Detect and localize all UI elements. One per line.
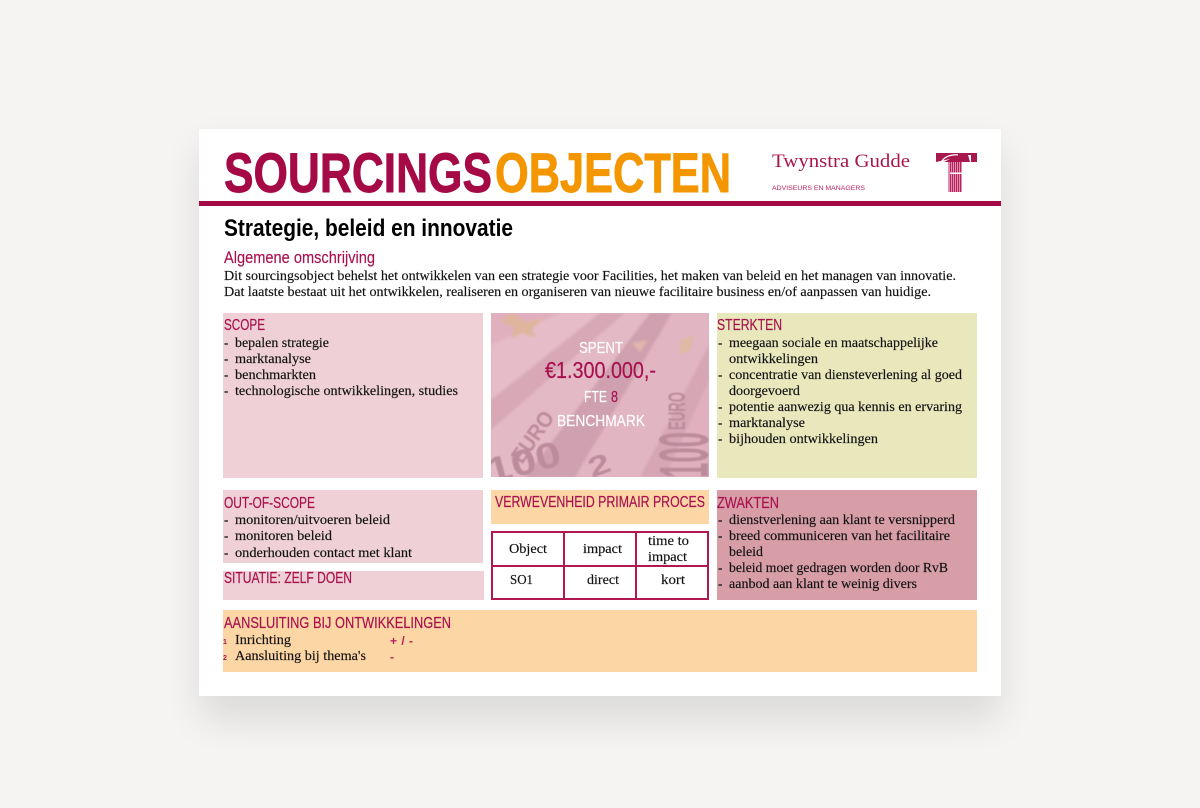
panel: sterkten: meegaan sociale en maatschappelijke <box>729 335 938 350</box>
panel: scope: technologische ontwikkelingen, studies <box>235 383 458 398</box>
panel: out-of-scope <box>223 490 483 563</box>
panel: sterkten: - <box>718 399 722 414</box>
panel: sterkten: potentie aanwezig qua kennis en ervaring <box>729 399 962 414</box>
table: impact: impact <box>648 549 687 564</box>
panel: zwakten: beleid moet gedragen worden door RvB <box>729 560 948 575</box>
panel: sterkten: - <box>718 367 722 382</box>
panel: scope: - <box>224 383 228 398</box>
sheet <box>199 129 1001 696</box>
panel: sterkten: ontwikkelingen <box>729 351 818 366</box>
panel: spent: 2 <box>583 447 615 484</box>
panel: zwakten: beleid <box>729 544 763 559</box>
panel: spent: EURO <box>664 392 691 430</box>
panel: zwakten: breed communiceren van het facilitaire <box>729 528 950 543</box>
panel: verwevenheid: VERWEVENHEID PRIMAIR PROCES <box>495 494 705 511</box>
table: impact: time to <box>648 533 689 548</box>
panel: aansluiting: 1 <box>223 639 227 646</box>
panel: spent: SPENT <box>579 340 623 357</box>
panel: sterkten: marktanalyse <box>729 415 805 430</box>
panel: out-of-scope: monitoren/uitvoeren beleid <box>235 512 390 527</box>
panel: aansluiting: + / - <box>390 634 413 648</box>
icon: logo column <box>936 153 977 192</box>
panel: scope: bepalen strategie <box>235 335 329 350</box>
panel: sterkten: doorgevoerd <box>729 383 800 398</box>
logo wordmark: ADVISEURS EN MANAGERS <box>772 185 865 192</box>
panel: out-of-scope: monitoren beleid <box>235 528 332 543</box>
panel: aansluiting: - <box>390 650 394 664</box>
description: Dat laatste bestaat uit het ontwikkelen, realiseren en organiseren van nieuwe facilitaire business en/of aanpassen van huidige. <box>224 284 931 299</box>
panel: zwakten: ZWAKTEN <box>717 495 779 512</box>
subtitle: Strategie, beleid en innovatie <box>224 215 513 242</box>
panel: sterkten: bijhouden ontwikkelingen <box>729 431 878 446</box>
panel: out-of-scope: - <box>224 545 228 560</box>
description <box>224 248 956 299</box>
panel: spent <box>491 313 709 477</box>
panel: scope: - <box>224 351 228 366</box>
panel: aansluiting <box>223 610 977 672</box>
panel: sterkten: - <box>718 431 722 446</box>
panel: aansluiting: AANSLUITING BIJ ONTWIKKELINGEN <box>224 615 451 632</box>
panel: spent: €1.300.000,- <box>545 357 656 383</box>
table: impact <box>492 532 708 599</box>
title: OBJECTEN <box>495 141 731 204</box>
panel: zwakten: - <box>718 512 722 527</box>
panel: spent: 100 <box>481 432 565 492</box>
panel: scope: marktanalyse <box>235 351 311 366</box>
panel: zwakten <box>717 490 977 600</box>
header rule <box>199 201 1001 206</box>
table: impact: impact <box>583 541 622 556</box>
panel: aansluiting: 2 <box>223 655 227 662</box>
table: impact: SO1 <box>510 572 533 587</box>
panel: spent: BENCHMARK <box>557 413 645 430</box>
logo wordmark: Twynstra Gudde <box>772 152 910 172</box>
panel: sterkten: - <box>718 415 722 430</box>
logo wordmark <box>772 152 910 192</box>
description: Dit sourcingsobject behelst het ontwikkelen van een strategie voor Facilities, het maken van beleid en het managen van innovatie. <box>224 268 956 283</box>
panel: spent: 100 <box>645 432 723 478</box>
panel: scope: benchmarkten <box>235 367 316 382</box>
panel: spent: EURO <box>506 406 559 468</box>
panel: out-of-scope: - <box>224 528 228 543</box>
panel: zwakten: - <box>718 560 722 575</box>
title <box>224 141 731 204</box>
panel: out-of-scope: OUT-OF-SCOPE <box>224 495 315 512</box>
panel: verwevenheid <box>491 490 709 524</box>
panel: scope: SCOPE <box>224 317 265 334</box>
panel: zwakten: - <box>718 576 722 591</box>
table: impact: kort <box>661 572 685 587</box>
panel: sterkten <box>717 313 977 478</box>
panel: zwakten: aanbod aan klant te weinig divers <box>729 576 917 591</box>
panel: out-of-scope: - <box>224 512 228 527</box>
panel: situatie <box>223 570 484 600</box>
panel: sterkten: concentratie van diensteverlening al goed <box>729 367 962 382</box>
panel: out-of-scope: onderhouden contact met klant <box>235 545 412 560</box>
panel: scope: - <box>224 335 228 350</box>
panel: sterkten: STERKTEN <box>717 317 782 334</box>
table: impact: direct <box>587 572 619 587</box>
table: impact: Object <box>509 541 547 556</box>
panel: aansluiting: Inrichting <box>235 632 291 647</box>
panel: scope <box>223 313 483 478</box>
title: SOURCINGS <box>224 141 492 204</box>
panel: aansluiting: Aansluiting bij thema's <box>235 648 366 663</box>
panel: spent: 8 <box>611 389 618 406</box>
panel: zwakten: dienstverlening aan klant te versnipperd <box>729 512 955 527</box>
panel: situatie: SITUATIE: ZELF DOEN <box>224 570 352 587</box>
panel: scope: - <box>224 367 228 382</box>
panel: sterkten: - <box>718 335 722 350</box>
panel: zwakten: - <box>718 528 722 543</box>
panel: spent: FTE <box>584 389 607 406</box>
description: Algemene omschrijving <box>224 248 375 267</box>
